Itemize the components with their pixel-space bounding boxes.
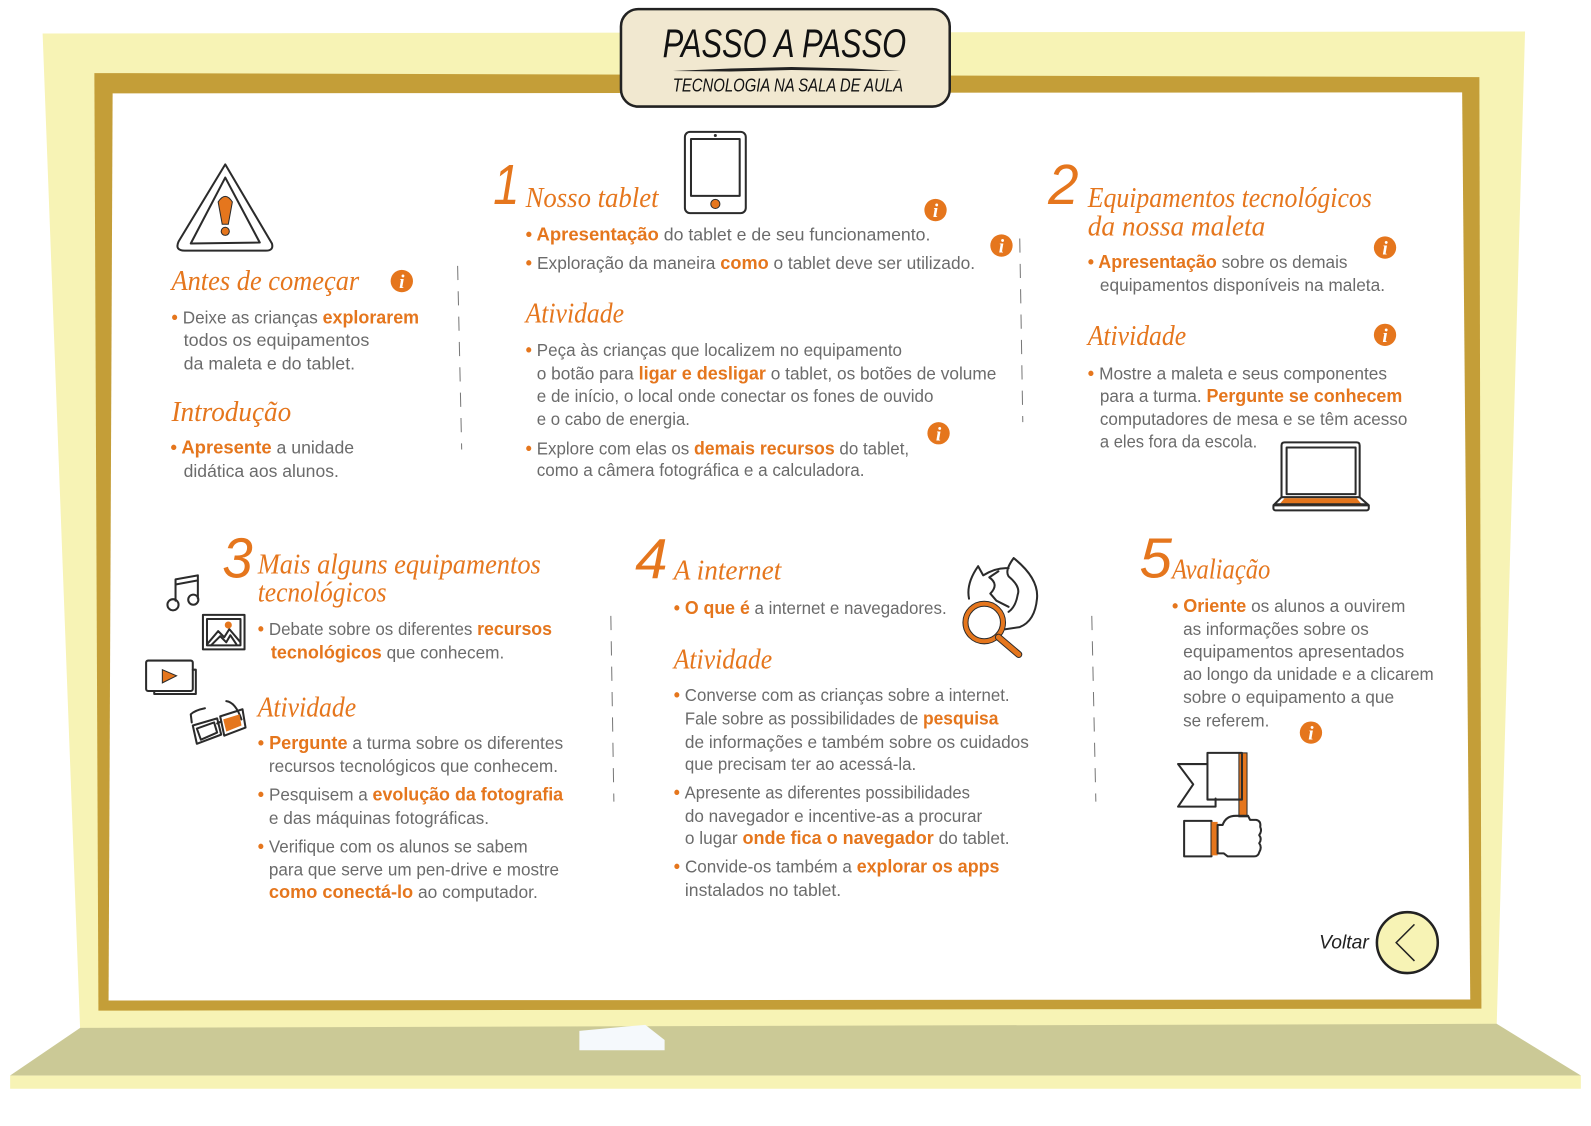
- icon: fist with flag: [1178, 753, 1261, 856]
- text block: do navegador e incentive-as a procurar: [685, 806, 982, 826]
- text block: [1088, 251, 1385, 295]
- text block: • Peça às crianças que localizem no equipamento: [526, 339, 902, 360]
- text block: ao longo da unidade e a clicarem: [1183, 664, 1434, 684]
- text block: o botão para ligar e desligar o tablet, os botões de volume: [537, 362, 997, 383]
- text block: [170, 437, 354, 481]
- circle arrow: [1377, 912, 1438, 973]
- text block: equipamentos disponíveis na maleta.: [1100, 275, 1385, 295]
- icon: browser and magnifier: [965, 558, 1037, 654]
- icon: video: [146, 661, 196, 694]
- icon: info: i: [1382, 326, 1388, 347]
- text block: • Debate sobre os diferentes recursos: [258, 618, 552, 639]
- number 3: 3: [222, 527, 253, 590]
- text block: • O que é a internet e navegadores.: [674, 597, 947, 618]
- label voltar: Voltar: [1319, 933, 1370, 954]
- panel: step 2 equipamentos: [1047, 154, 1407, 510]
- text block: as informações sobre os: [1183, 619, 1369, 639]
- text block: como a câmera fotográfica e a calculadora.: [537, 460, 864, 480]
- text block: equipamentos apresentados: [1183, 642, 1404, 662]
- text block: tecnológicos que conhecem.: [271, 642, 504, 663]
- heading: [1087, 183, 1372, 242]
- heading: A internet: [672, 555, 782, 586]
- text block: • Apresentação do tablet e de seu funcionamento.: [526, 223, 930, 244]
- text block: e o cabo de energia.: [537, 409, 690, 429]
- text block: • Apresentação sobre os demais: [1088, 251, 1348, 272]
- number 5: 5: [1139, 527, 1172, 590]
- icon: info: i: [936, 424, 942, 445]
- text block: didática aos alunos.: [184, 461, 339, 481]
- icon: info: i: [399, 272, 405, 293]
- heading: Mais alguns equipamentos: [257, 549, 541, 580]
- text block: • Oriente os alunos a ouvirem: [1172, 595, 1405, 616]
- icon: info: i: [999, 237, 1005, 258]
- heading: tecnológicos: [258, 578, 387, 609]
- text block: a eles fora da escola.: [1100, 431, 1257, 451]
- heading: Atividade: [1086, 321, 1186, 352]
- text block: • Mostre a maleta e seus componentes: [1088, 362, 1387, 383]
- brush underline: [673, 67, 901, 72]
- heading: Atividade: [256, 692, 356, 723]
- icon: info: [927, 422, 950, 445]
- text block: da maleta e do tablet.: [184, 353, 355, 373]
- text block: • Exploração da maneira como o tablet deve ser utilizado.: [526, 252, 975, 273]
- icon: picture: [203, 615, 245, 649]
- text block: • Apresente a unidade: [170, 437, 354, 458]
- text block: • Pesquisem a evolução da fotografia: [258, 784, 564, 805]
- icon: info: [924, 199, 947, 222]
- text block: [171, 307, 419, 373]
- text block: • Convide-os também a explorar os apps: [674, 856, 999, 877]
- heading: Atividade: [524, 299, 624, 330]
- text block: computadores de mesa e se têm acesso: [1100, 409, 1407, 429]
- icon: warning triangle: [177, 164, 272, 251]
- heading: Nosso tablet: [525, 183, 660, 214]
- text block: para a turma. Pergunte se conhecem: [1100, 385, 1402, 406]
- text block: • Deixe as crianças explorarem: [171, 307, 419, 328]
- text block: [674, 684, 1029, 900]
- text block: se referem.: [1183, 711, 1269, 731]
- icon: tablet: [685, 132, 746, 213]
- text block: [526, 223, 975, 273]
- number 4: 4: [635, 528, 668, 591]
- text block: de informações e também sobre os cuidados: [685, 732, 1029, 752]
- number 1: 1: [493, 154, 520, 217]
- text block: todos os equipamentos: [184, 330, 369, 350]
- text block: recursos tecnológicos que conhecem.: [269, 756, 558, 776]
- text block: [258, 732, 564, 902]
- panel: step 4 a internet: [635, 528, 1037, 900]
- text block: [1172, 595, 1434, 731]
- icon: info: [391, 270, 413, 293]
- back button: [1319, 912, 1438, 973]
- text block: o lugar onde fica o navegador do tablet.: [685, 827, 1010, 848]
- text block: [526, 339, 997, 480]
- icon: music note: [167, 575, 198, 610]
- text block: • Explore com elas os demais recursos do tablet,: [526, 438, 909, 459]
- heading: da nossa maleta: [1088, 211, 1265, 242]
- text block: como conectá-lo ao computador.: [269, 881, 538, 902]
- text block: e das máquinas fotográficas.: [269, 808, 489, 828]
- text block: para que serve um pen-drive e mostre: [269, 860, 559, 880]
- icon: laptop: [1273, 442, 1369, 510]
- heading: [257, 549, 541, 609]
- subtitle: TECNOLOGIA NA SALA DE AULA: [673, 74, 903, 95]
- panel: step 5 avaliação: [1139, 527, 1434, 856]
- heading: Avaliação: [1170, 554, 1270, 585]
- text block: • Apresente as diferentes possibilidades: [674, 782, 970, 803]
- panel: antes de começar: [170, 164, 419, 481]
- icon: info: i: [1382, 239, 1388, 260]
- heading: Equipamentos tecnológicos: [1087, 183, 1372, 214]
- text block: • Verifique com os alunos se sabem: [258, 835, 528, 856]
- text block: que precisam ter ao acessá-la.: [685, 754, 916, 774]
- chalk ledge: [10, 1024, 1581, 1089]
- number 2: 2: [1047, 154, 1079, 217]
- title: PASSO A PASSO: [663, 22, 906, 66]
- text block: e de início, o local onde conectar os fones de ouvido: [537, 386, 934, 406]
- text block: sobre o equipamento a que: [1183, 687, 1394, 707]
- panel: step 1 nosso tablet: [493, 132, 1013, 480]
- icon: info: i: [1308, 724, 1314, 745]
- heading: Introdução: [171, 397, 291, 428]
- icon: info: [1374, 324, 1396, 347]
- icon: info: [1300, 721, 1322, 745]
- icon: info: i: [933, 201, 939, 222]
- title plaque: [621, 9, 950, 107]
- icon: info: [1374, 236, 1396, 260]
- text block: • Converse com as crianças sobre a internet.: [674, 684, 1010, 705]
- text block: [258, 618, 552, 663]
- icon: glasses: [191, 701, 246, 744]
- text block: • Pergunte a turma sobre os diferentes: [258, 732, 563, 753]
- text block: instalados no tablet.: [685, 880, 841, 900]
- icon: info: [990, 234, 1013, 258]
- text block: [1088, 362, 1407, 451]
- heading: Antes de começar: [170, 266, 360, 297]
- text block: Fale sobre as possibilidades de pesquisa: [685, 707, 999, 728]
- heading: Atividade: [672, 645, 772, 676]
- panel: step 3 mais equipamentos: [146, 527, 564, 902]
